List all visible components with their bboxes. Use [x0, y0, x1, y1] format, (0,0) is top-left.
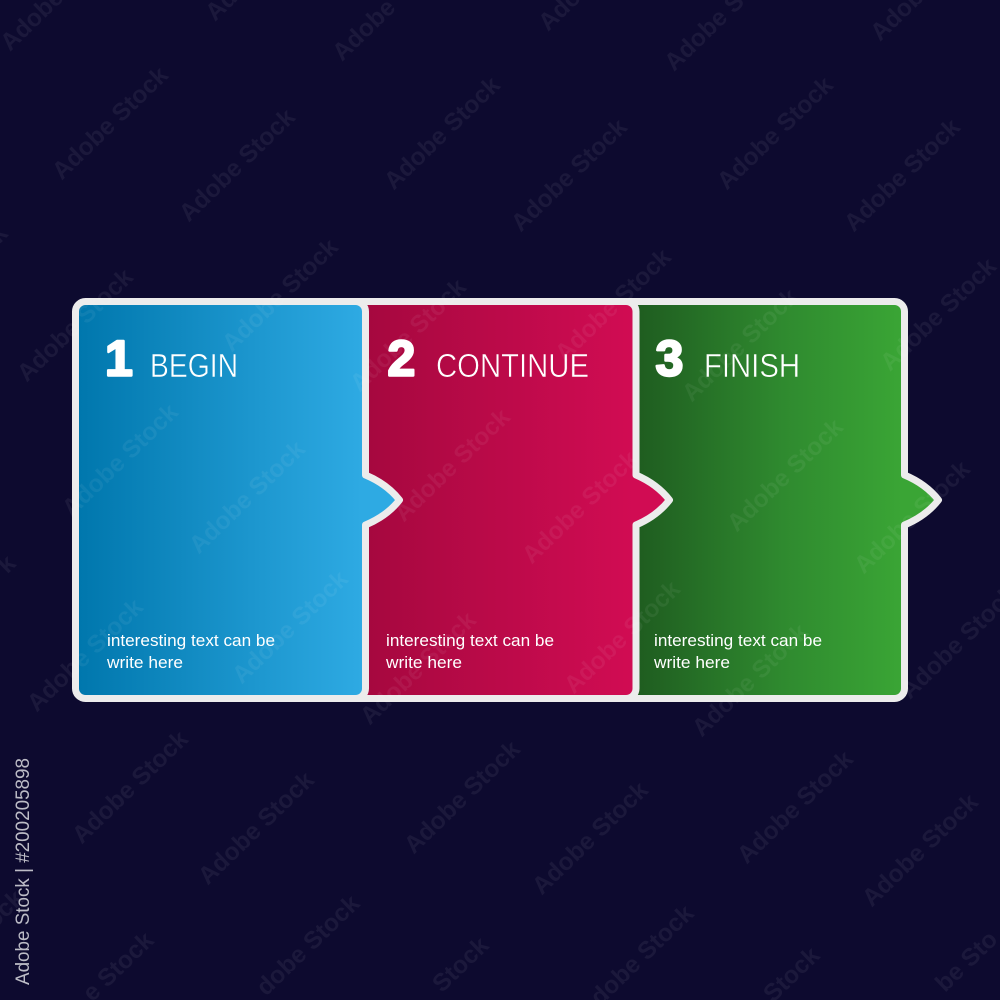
watermark pattern: Adobe Stock	[687, 618, 814, 742]
watermark pattern: Adobe Stock	[67, 725, 194, 849]
watermark pattern: Adobe Stock	[857, 788, 984, 912]
watermark pattern: Adobe Stock	[517, 445, 644, 569]
step 3 body text line 2: write here	[653, 653, 730, 672]
step 1 number: 1	[105, 330, 133, 386]
step 1 body text line 1: interesting text can be	[107, 631, 275, 650]
watermark pattern: Adobe Stock	[217, 233, 344, 357]
step 2 body text line 2: write here	[385, 653, 462, 672]
watermark pattern: Adobe Stock	[559, 575, 686, 699]
watermark pattern: Adobe Stock	[389, 403, 516, 527]
watermark pattern: Adobe Stock	[399, 735, 526, 859]
panel 2 shape with arrow	[330, 302, 670, 698]
panel 3 shape with arrow	[600, 302, 938, 698]
step 3 label: FINISH	[704, 347, 800, 384]
watermark pattern: Adobe Stock	[677, 283, 804, 407]
watermark pattern: Adobe Stock	[839, 113, 966, 237]
watermark pattern: Adobe Stock	[722, 413, 849, 537]
watermark pattern: Adobe Stock	[193, 766, 320, 890]
panel: step 1 begin	[76, 302, 400, 698]
watermark pattern: Adobe Stock	[849, 455, 976, 579]
step 3 number: 3	[656, 330, 683, 386]
watermark pattern: Adobe Stock	[550, 243, 677, 367]
panel: step 3 finish	[600, 302, 938, 698]
step 2 label: CONTINUE	[436, 347, 589, 384]
watermark pattern: dobe Stock	[251, 890, 365, 1000]
watermark pattern: Adobe Stock	[712, 71, 839, 195]
panel 1 shape with arrow	[76, 302, 400, 698]
watermark pattern: Adobe Stock	[506, 113, 633, 237]
watermark pattern: Adobe Stock	[184, 435, 311, 559]
watermark pattern: Stock	[427, 932, 494, 998]
watermark pattern: Adobe Stock	[57, 398, 184, 522]
watermark pattern: Adobe Stock	[379, 71, 506, 195]
watermark pattern: Adobe Stock	[47, 61, 174, 185]
stock id side text: Adobe Stock | #200205898	[13, 758, 34, 985]
watermark pattern: Adobe Stock	[12, 263, 139, 387]
step 2 body text line 1: interesting text can be	[386, 631, 554, 650]
watermark pattern: Adobe Stock	[355, 606, 482, 730]
watermark pattern: Adobe Stock	[732, 745, 859, 869]
step 3 body text line 1: interesting text can be	[654, 631, 822, 650]
watermark pattern: Adobe Stock	[174, 103, 301, 227]
watermark pattern: Adobe Stock	[22, 593, 149, 717]
watermark pattern: Adobe Stock	[875, 253, 1000, 376]
step 2 number: 2	[388, 330, 415, 386]
step 1 label: BEGIN	[150, 347, 238, 384]
watermark pattern: Adobe Stock	[527, 776, 654, 900]
panel: step 2 continue	[330, 302, 670, 698]
watermark pattern: Adobe Stock	[227, 565, 354, 689]
step 1 body text line 2: write here	[106, 653, 183, 672]
watermark pattern: Adobe Stock	[345, 273, 472, 397]
